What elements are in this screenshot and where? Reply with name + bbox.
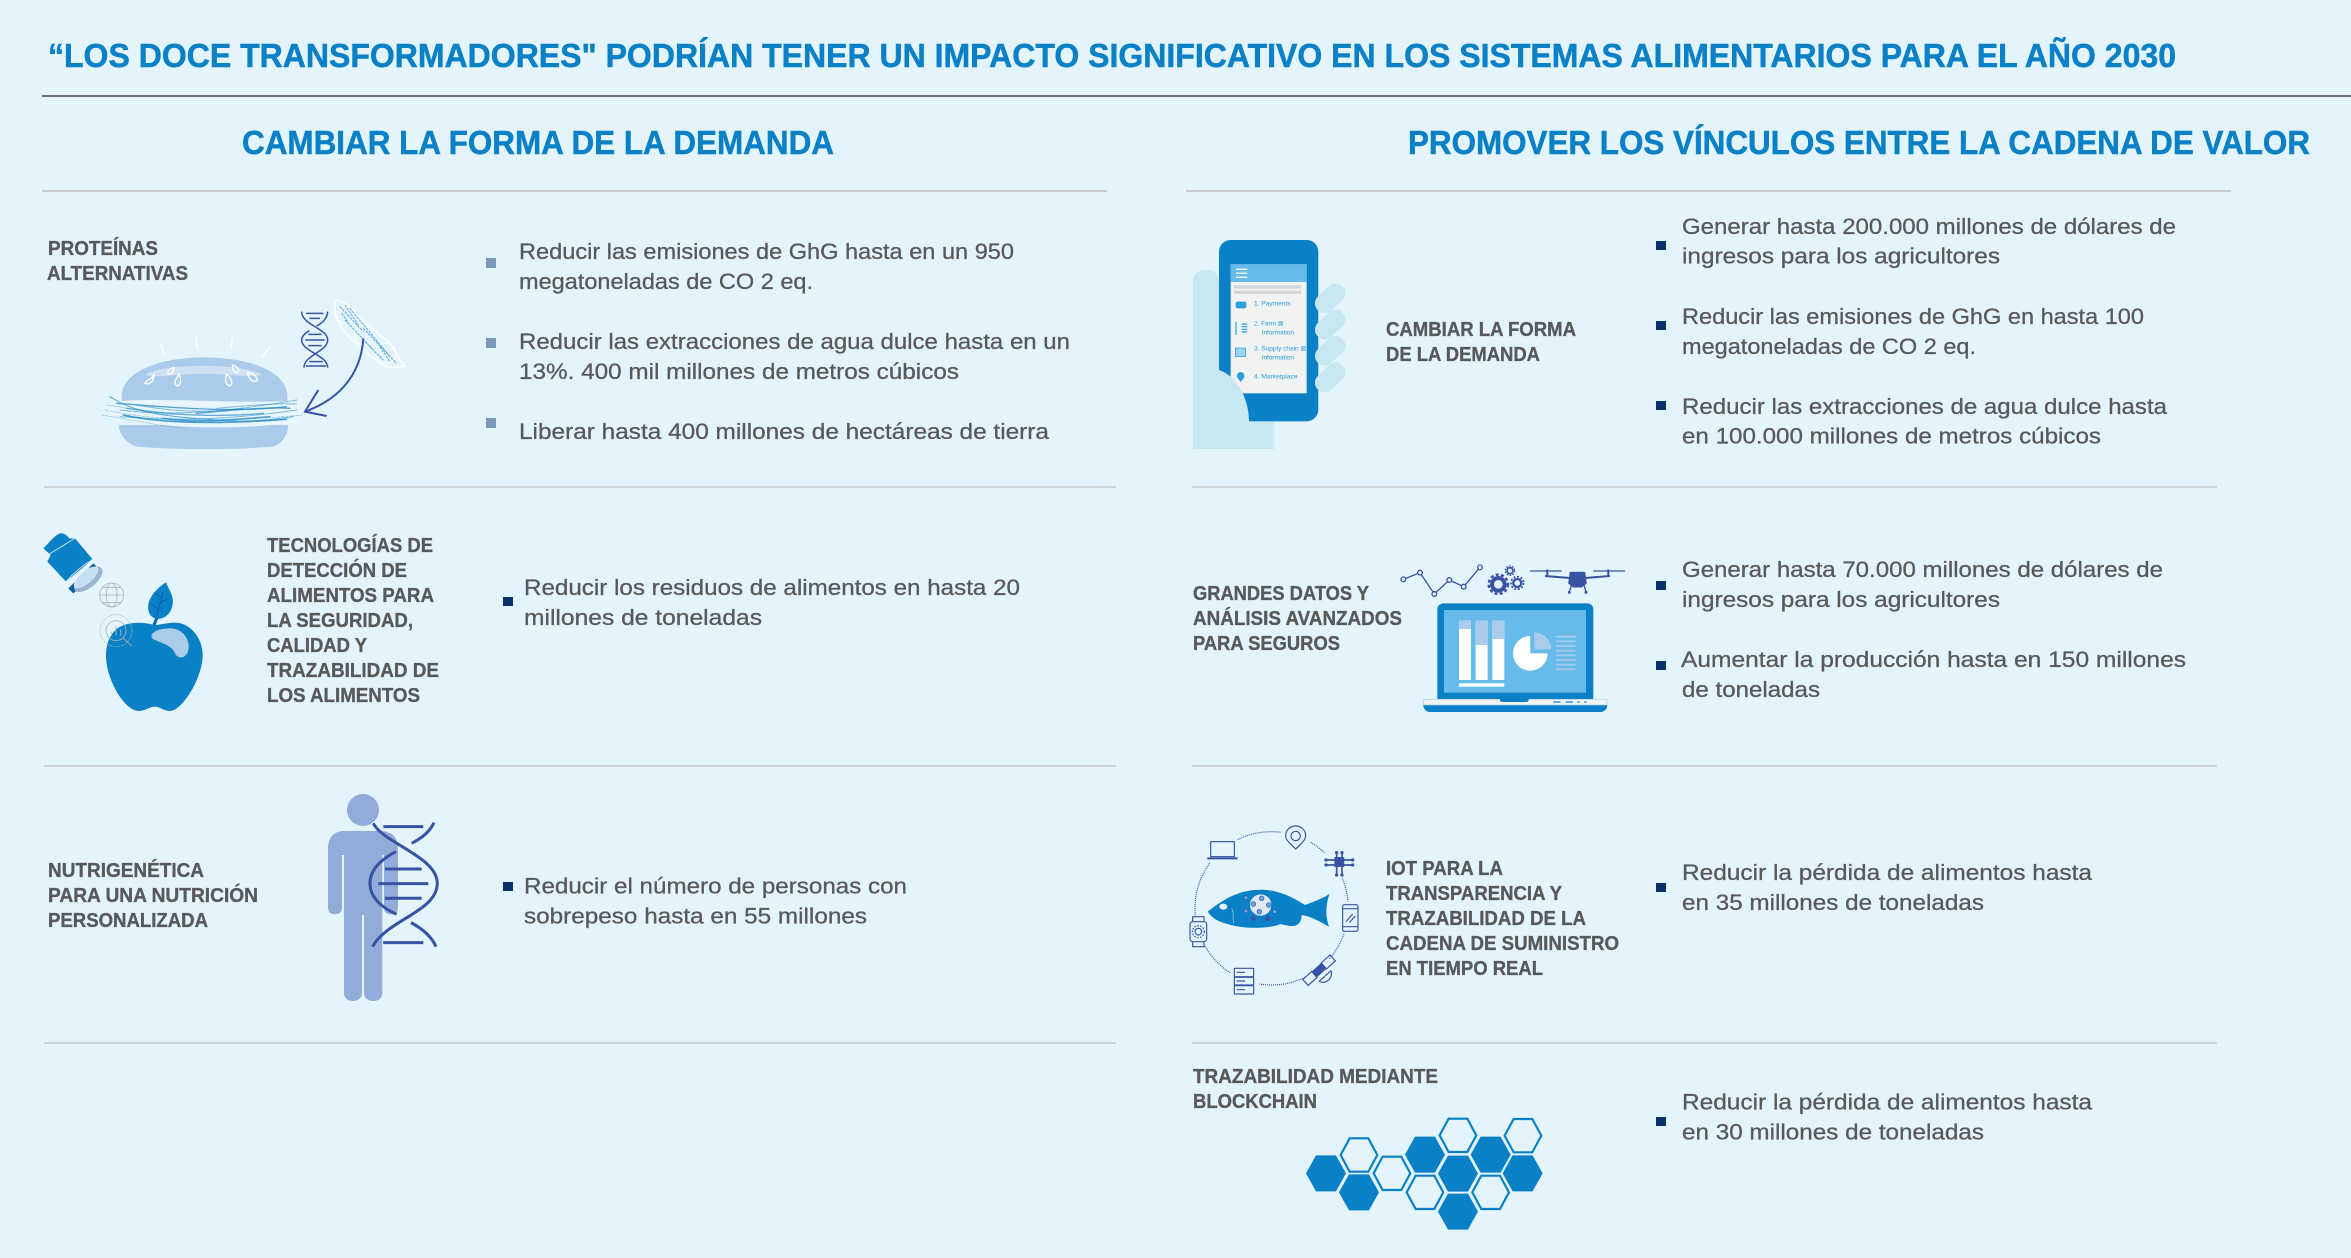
icon: hand holding phone: 4. Marketplace <box>1254 374 1298 381</box>
bullets: cambiar la forma de la demanda: Reducir las extracciones de agua dulce hasta <box>1682 394 2168 419</box>
label: iot: IOT PARA LA <box>1386 857 1503 880</box>
bullet: pérdida de alimentos 30 <box>1656 1090 2093 1144</box>
icon: person with dna helix <box>328 794 437 1001</box>
label: nutrigenética: PERSONALIZADA <box>48 909 208 932</box>
row: iot <box>1182 821 2093 997</box>
bullets: cambiar la forma de la demanda <box>1656 214 2176 448</box>
row: proteínas alternativas <box>47 237 1070 449</box>
bullet: residuos de alimentos <box>503 575 1020 630</box>
title: “LOS DOCE TRANSFORMADORES" PODRÍAN TENER UN IMPACTO SIGNIFICATIVO EN LOS SISTEMAS ALIMENTARIOS PARA EL AÑO 2030 <box>48 37 2176 74</box>
column heading: promover los vínculos: PROMOVER LOS VÍNCULOS ENTRE LA CADENA DE VALOR <box>1408 124 2310 161</box>
icon: burger with soybean pod, dna and arrow <box>102 300 405 449</box>
bullet: residuos de alimentos: millones de toneladas <box>524 605 762 630</box>
panel: right column, value chain links <box>1182 124 2310 1230</box>
label: iot: EN TIEMPO REAL <box>1386 957 1543 980</box>
bullets: cambiar la forma de la demanda: megatoneladas de CO 2 eq. <box>1682 334 1976 359</box>
bullets: grandes datos: Aumentar la producción hasta en 150 millones <box>1681 647 2186 672</box>
bullets: cambiar la forma de la demanda: Generar hasta 200.000 millones de dólares de <box>1682 214 2176 239</box>
label: tecnologías de detección: LA SEGURIDAD, <box>267 609 413 632</box>
bullets: grandes datos <box>1656 557 2186 702</box>
bullets: cambiar la forma de la demanda: ingresos para los agricultores <box>1682 244 2000 268</box>
bullet: sobrepeso <box>503 874 907 928</box>
label: blockchain: BLOCKCHAIN <box>1193 1090 1317 1113</box>
label: iot: CADENA DE SUMINISTRO <box>1386 932 1619 955</box>
bullets: proteínas alternativas <box>486 239 1070 444</box>
icon: hand holding phone: Information <box>1262 355 1294 362</box>
bullet: sobrepeso: sobrepeso hasta en 55 millones <box>524 904 867 928</box>
column heading: cambiar la forma de la demanda: CAMBIAR LA FORMA DE LA DEMANDA <box>242 124 834 161</box>
label: iot: TRANSPARENCIA Y <box>1386 882 1562 905</box>
bullet: pérdida de alimentos 30: en 30 millones de toneladas <box>1682 1120 1984 1144</box>
icon: hand holding phone: 3. Supply chain ⊠ <box>1254 346 1306 353</box>
label: cambiar la forma de la demanda: CAMBIAR LA FORMA <box>1386 318 1576 341</box>
bullets: cambiar la forma de la demanda: Reducir las emisiones de GhG en hasta 100 <box>1682 304 2144 329</box>
label: tecnologías de detección: DETECCIÓN DE <box>267 558 407 582</box>
icon: blockchain hexagons <box>1306 1119 1543 1230</box>
bullet: pérdida de alimentos 35: en 35 millones de toneladas <box>1682 890 1984 915</box>
label: nutrigenética: NUTRIGENÉTICA <box>48 859 204 882</box>
label: cambiar la forma de la demanda <box>1386 318 1576 366</box>
bullets: proteínas alternativas: Reducir las extracciones de agua dulce hasta en un <box>519 329 1070 354</box>
label: proteínas alternativas: PROTEÍNAS <box>48 237 158 260</box>
label: blockchain <box>1193 1065 1438 1113</box>
bullets: proteínas alternativas: 13%. 400 mil millones de metros cúbicos <box>519 359 959 384</box>
row: cambiar la forma de la demanda <box>1193 214 2176 449</box>
bullet: sobrepeso: Reducir el número de personas con <box>524 874 907 898</box>
label: blockchain: TRAZABILIDAD MEDIANTE <box>1193 1065 1438 1088</box>
bullets: proteínas alternativas: Reducir las emisiones de GhG hasta en un 950 <box>519 239 1014 264</box>
row: grandes datos <box>1193 557 2186 712</box>
bullets: cambiar la forma de la demanda: en 100.000 millones de metros cúbicos <box>1682 424 2101 448</box>
label: iot <box>1386 857 1619 980</box>
row: nutrigenética <box>48 794 907 1001</box>
label: grandes datos: GRANDES DATOS Y <box>1193 582 1369 605</box>
bullet: pérdida de alimentos 30: Reducir la pérdida de alimentos hasta <box>1682 1090 2093 1114</box>
bullets: grandes datos: Generar hasta 70.000 millones de dólares de <box>1682 557 2163 582</box>
label: tecnologías de detección: TECNOLOGÍAS DE <box>267 534 433 557</box>
label: proteínas alternativas: ALTERNATIVAS <box>47 262 188 285</box>
label: iot: TRAZABILIDAD DE LA <box>1386 907 1586 930</box>
row: blockchain <box>1193 1065 2093 1230</box>
bullet: pérdida de alimentos 35 <box>1656 860 2093 915</box>
label: tecnologías de detección: LOS ALIMENTOS <box>267 684 420 707</box>
icon: hand holding phone: 1. Payments <box>1254 301 1291 308</box>
icon: hand holding phone <box>1193 240 1336 449</box>
bullets: proteínas alternativas: megatoneladas de CO 2 eq. <box>519 269 813 294</box>
label: grandes datos: PARA SEGUROS <box>1193 632 1340 655</box>
icon: hand holding phone: Information <box>1262 330 1294 337</box>
row: tecnologías de detección <box>43 533 1020 711</box>
label: cambiar la forma de la demanda: DE LA DEMANDA <box>1386 343 1540 366</box>
label: tecnologías de detección: CALIDAD Y <box>267 634 367 657</box>
bullets: grandes datos: de toneladas <box>1682 677 1820 702</box>
label: tecnologías de detección: ALIMENTOS PARA <box>267 584 434 607</box>
icon: fish in ring of connected devices <box>1182 821 1367 997</box>
bullet: residuos de alimentos: Reducir los residuos de alimentos en hasta 20 <box>524 575 1020 600</box>
label: tecnologías de detección <box>267 534 439 707</box>
icon: hand holding phone: 2. Farm ⊠ <box>1254 321 1283 328</box>
label: grandes datos <box>1193 582 1402 655</box>
bullets: proteínas alternativas: Liberar hasta 400 millones de hectáreas de tierra <box>519 419 1050 444</box>
icon: lens scanning an apple <box>43 533 203 711</box>
label: grandes datos: ANÁLISIS AVANZADOS <box>1193 607 1402 630</box>
label: proteínas alternativas <box>47 237 188 285</box>
icon: laptop with charts, gears and drone <box>1401 565 1625 712</box>
label: tecnologías de detección: TRAZABILIDAD DE <box>267 659 439 682</box>
label: nutrigenética <box>48 859 258 932</box>
label: nutrigenética: PARA UNA NUTRICIÓN <box>48 883 258 907</box>
bullets: grandes datos: ingresos para los agricultores <box>1682 587 2000 612</box>
panel: left column, shaping demand <box>42 124 1116 1043</box>
bullet: pérdida de alimentos 35: Reducir la pérdida de alimentos hasta <box>1682 860 2093 885</box>
